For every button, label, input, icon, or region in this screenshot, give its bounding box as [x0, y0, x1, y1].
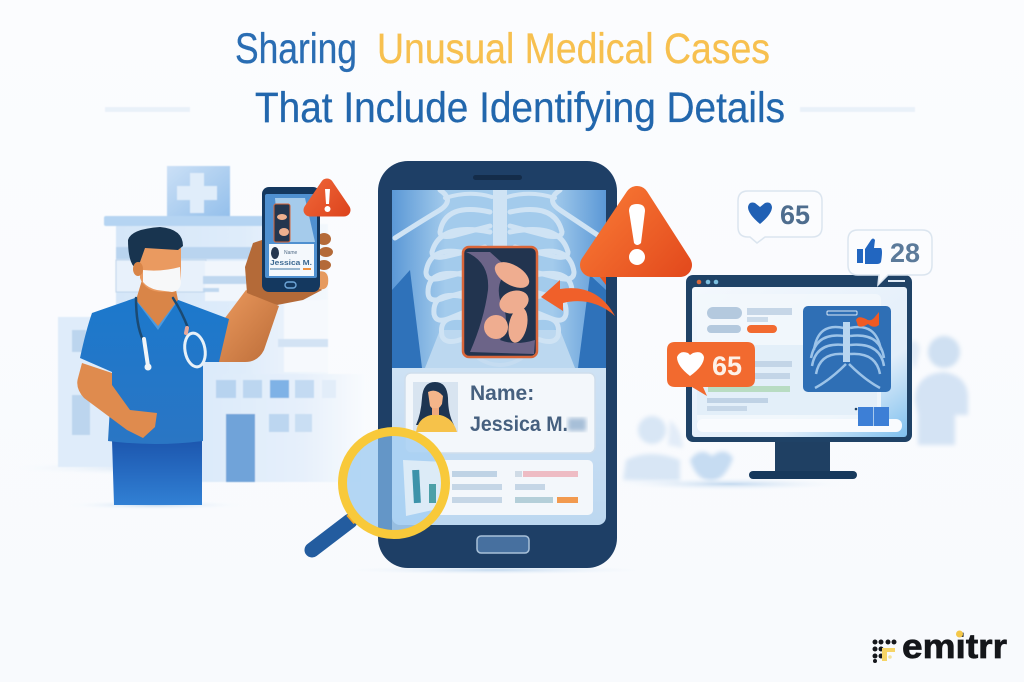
monitor x-ray image [803, 306, 891, 392]
logo mark [872, 640, 896, 663]
doctor figure [65, 185, 344, 510]
magnifier handle [312, 513, 358, 550]
small phone [262, 187, 320, 292]
title: Unusual Medical Cases [377, 25, 770, 73]
record card [430, 460, 593, 515]
thumbs up reaction bubble: 28 [890, 238, 920, 268]
main phone [378, 161, 617, 568]
phone screen [392, 190, 606, 525]
window controls [697, 280, 905, 284]
heart reaction bubble: 65 [780, 200, 810, 230]
orange heart bubble [667, 342, 755, 396]
doctor neck and head [128, 227, 183, 326]
title [235, 25, 785, 132]
audience silhouettes [623, 336, 968, 482]
surgical mask [143, 267, 181, 292]
small alert icon [310, 185, 344, 212]
doctor left forearm and fist [77, 363, 157, 438]
heart reaction bubble [738, 191, 822, 243]
stethoscope [136, 298, 208, 370]
emitrr logo: emitrr [902, 628, 1007, 666]
title: That Include Identifying Details [255, 84, 785, 132]
title: Sharing [235, 25, 357, 73]
chest x-ray image [392, 190, 606, 368]
curved arrow [541, 280, 615, 316]
hospital building [0, 166, 380, 482]
monitor post text lines [707, 307, 792, 411]
doctor torso [80, 298, 229, 444]
doctor raised arm [218, 290, 279, 362]
patient avatar [413, 382, 458, 432]
monitor [686, 275, 912, 479]
name card: Jessica M. [470, 413, 568, 436]
large alert icon [592, 198, 680, 285]
highlighted scan panel [463, 247, 537, 357]
patient name text: Name: [470, 382, 534, 405]
orange heart bubble: 65 [712, 351, 742, 381]
monitor small icon [855, 407, 889, 426]
name card [405, 373, 595, 453]
phone home button [477, 536, 529, 553]
monitor stand [749, 442, 857, 479]
small phone: Jessica M. [270, 260, 312, 267]
small phone: Name [284, 250, 298, 256]
phone speaker [473, 175, 522, 180]
magnifying glass [312, 420, 446, 550]
tissue shapes [484, 257, 533, 344]
thumbs up reaction bubble [848, 230, 932, 285]
doctor hand behind phone [245, 233, 333, 305]
magnified chart [378, 436, 441, 530]
doctor pants [112, 440, 202, 505]
main phone shadow [330, 565, 660, 575]
